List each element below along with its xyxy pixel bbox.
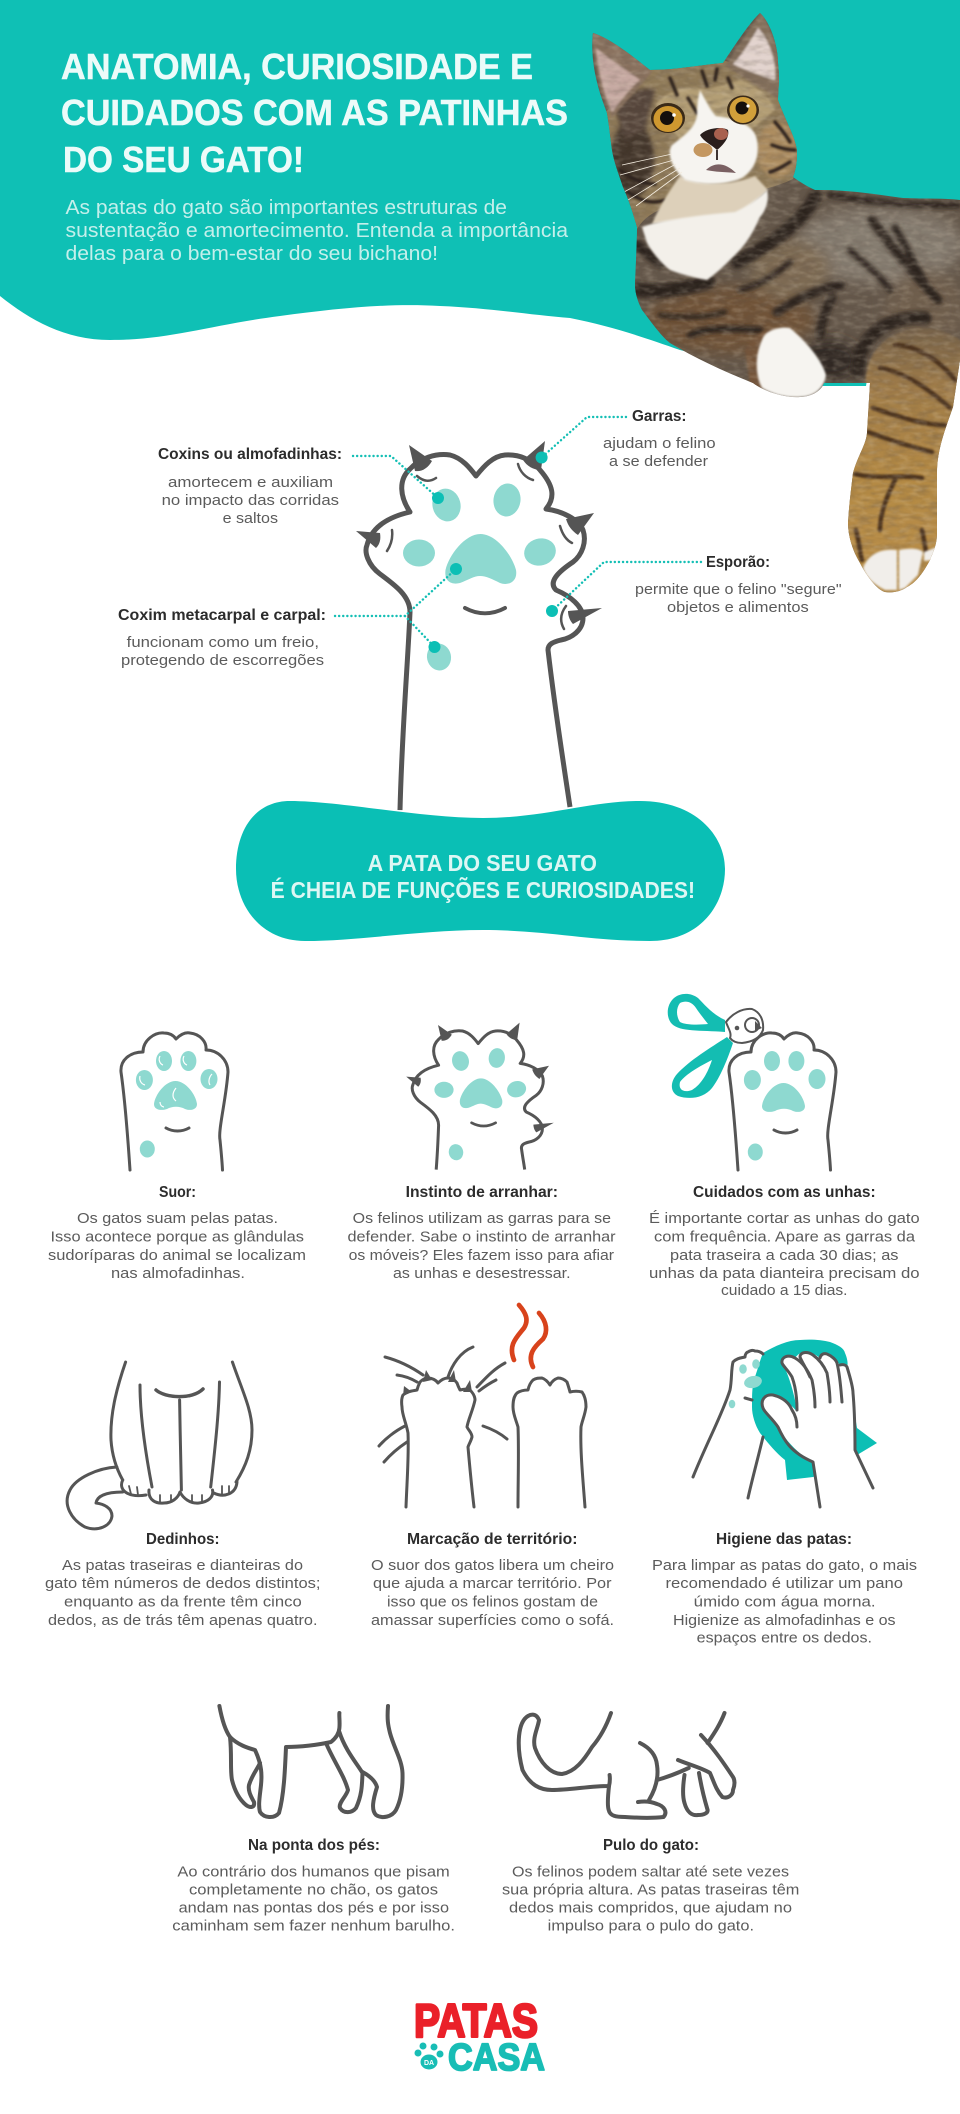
- logo paw icon: DA: [424, 2060, 434, 2067]
- label: garras: Garras:: [632, 408, 686, 425]
- icon: paw being clipped: [729, 1033, 836, 1170]
- cat cream neck: [652, 176, 768, 224]
- pulo text: sua própria altura. As patas traseiras têm: [502, 1882, 799, 1898]
- label: coxim metacarpal e carpal: Coxim metacarpal e carpal:: [118, 607, 326, 624]
- paw outline: [366, 455, 584, 810]
- claws: [356, 441, 602, 624]
- leader lines: [335, 417, 701, 647]
- label: coxins: no impacto das corridas: [162, 492, 339, 509]
- cuidados text: É importante cortar as unhas do gato: [649, 1210, 920, 1227]
- title: CUIDADOS COM AS PATINHAS: [61, 92, 568, 133]
- intro text: delas para o bem-estar do seu bichano!: [66, 243, 438, 265]
- icon: jumping cat: [519, 1713, 734, 1818]
- instinto text: as unhas e desestressar.: [393, 1265, 570, 1282]
- logo: patas da casa: [414, 1994, 545, 2079]
- cat head colouring: [605, 60, 799, 229]
- cat ears: [590, 10, 782, 118]
- marcação text: [371, 1531, 614, 1629]
- cuidados text: pata traseira a cada 30 dias; as: [670, 1247, 898, 1264]
- suor text: Os gatos suam pelas patas.: [77, 1210, 278, 1227]
- logo word patas: PATAS: [414, 1994, 538, 2047]
- cuidados text: com frequência. Apare as garras da: [654, 1229, 916, 1246]
- na ponta text: [172, 1837, 455, 1935]
- panel: marcação de território: [371, 1305, 614, 1629]
- panel: higiene das patas: [652, 1340, 917, 1647]
- marcação text: Marcação de território:: [407, 1531, 578, 1548]
- cat white front paw: [757, 328, 826, 397]
- mouth arc: [465, 608, 505, 613]
- teal banner blob: [236, 801, 725, 941]
- higiene text: recomendado é utilizar um pano: [666, 1575, 903, 1592]
- cat base coat: [585, 5, 960, 605]
- intro text: As patas do gato são importantes estruturas de: [66, 197, 507, 219]
- cat white muzzle: [670, 90, 758, 184]
- cat whiskers: [620, 154, 682, 206]
- intro text: sustentação e amortecimento. Entenda a importância: [66, 220, 569, 242]
- instinto text: defender. Sabe o instinto de arranhar: [348, 1229, 616, 1246]
- label: coxim metacarpal e carpal: [118, 607, 326, 669]
- label: esporão: [635, 554, 842, 616]
- panel: instinto de arranhar: [348, 1023, 616, 1282]
- dedinhos text: enquanto as da frente têm cinco: [64, 1594, 302, 1611]
- higiene text: espaços entre os dedos.: [697, 1630, 872, 1647]
- marcação text: O suor dos gatos libera um cheiro: [371, 1557, 614, 1574]
- label: esporão: permite que o felino "segure": [635, 581, 842, 598]
- pulo text: Os felinos podem saltar até sete vezes: [512, 1864, 789, 1881]
- dedinhos text: Dedinhos:: [146, 1531, 220, 1548]
- icon: paw with claws: [406, 1023, 554, 1170]
- icon: human hand: [762, 1352, 873, 1507]
- cat foreleg stripes: [855, 345, 955, 560]
- label: coxins: amortecem e auxiliam: [168, 474, 333, 491]
- header background wave: [0, 0, 960, 386]
- marcação text: amassar superfícies como o sofá.: [371, 1612, 614, 1629]
- cat fur texture: [585, 5, 960, 605]
- instinto text: [348, 1184, 616, 1282]
- label: coxim metacarpal e carpal: protegendo de escorregões: [121, 652, 324, 669]
- label: esporão: objetos e alimentos: [667, 599, 809, 616]
- cuidados text: Cuidados com as unhas:: [693, 1184, 876, 1201]
- suor text: nas almofadinhas.: [111, 1265, 245, 1282]
- icon: cleaning cloth: [752, 1340, 877, 1480]
- label: esporão: Esporão:: [706, 554, 770, 571]
- instinto text: Instinto de arranhar:: [406, 1184, 558, 1201]
- panel: dedinhos: [45, 1362, 320, 1629]
- higiene text: úmido com água morna.: [694, 1594, 876, 1611]
- suor text: Isso acontece porque as glândulas: [50, 1229, 304, 1246]
- na ponta text: andam nas pontas dos pés e por isso: [179, 1900, 449, 1917]
- na ponta text: caminham sem fazer nenhum barulho.: [172, 1918, 455, 1935]
- icon: nail clipper: [668, 994, 763, 1098]
- panel: pulo do gato: [502, 1713, 799, 1935]
- pulo text: Pulo do gato:: [603, 1837, 699, 1854]
- higiene text: [652, 1531, 917, 1647]
- title: ANATOMIA, CURIOSIDADE E: [61, 46, 533, 87]
- icon: sweating paw: [121, 1033, 228, 1170]
- panel: na ponta dos pés: [172, 1706, 455, 1935]
- icon: orange scent lines: [512, 1305, 546, 1367]
- cat illustration: [585, 5, 960, 605]
- leader dots: [428, 452, 558, 653]
- panel: cuidados com as unhas: [649, 994, 920, 1299]
- na ponta text: Na ponta dos pés:: [248, 1837, 380, 1854]
- higiene text: Higiene das patas:: [716, 1531, 852, 1548]
- title: [61, 46, 568, 180]
- icon: kneading paws: [379, 1347, 586, 1507]
- na ponta text: completamente no chão, os gatos: [189, 1882, 438, 1898]
- intro text: [66, 197, 569, 265]
- cat head stripes: [620, 69, 795, 202]
- anatomy diagram: labelled paw: [335, 417, 701, 810]
- cat hanging foreleg: [848, 330, 960, 592]
- panel: suor: [48, 1033, 306, 1282]
- na ponta text: Ao contrário dos humanos que pisam: [177, 1864, 450, 1881]
- pulo text: [502, 1837, 799, 1935]
- dedinhos text: gato têm números de dedos distintos;: [45, 1575, 320, 1592]
- claw sheath arcs: [387, 464, 572, 629]
- dedinhos text: [45, 1531, 320, 1629]
- pulo text: impulso para o pulo do gato.: [548, 1918, 754, 1935]
- suor text: sudoríparas do animal se localizam: [48, 1247, 306, 1264]
- cat nose and mouth: [694, 128, 736, 173]
- label: coxins: e saltos: [223, 510, 278, 527]
- label: garras: a se defender: [609, 453, 708, 470]
- suor text: Suor:: [159, 1184, 196, 1201]
- label: garras: [603, 408, 716, 470]
- cat eyes: [651, 96, 759, 133]
- icon: cat paw being cleaned: [693, 1350, 763, 1498]
- main pad: [445, 534, 516, 584]
- instinto text: Os felinos utilizam as garras para se: [353, 1210, 611, 1227]
- marcação text: que ajuda a marcar território. Por: [373, 1575, 612, 1592]
- higiene text: Para limpar as patas do gato, o mais: [652, 1557, 917, 1574]
- carpal pad: [424, 641, 454, 673]
- title: DO SEU GATO!: [63, 139, 304, 180]
- teal banner blob: É CHEIA DE FUNÇÕES E CURIOSIDADES!: [271, 876, 695, 903]
- cat white chest: [642, 190, 768, 280]
- logo word casa: CASA: [448, 2037, 545, 2079]
- cuidados text: unhas da pata dianteira precisam do: [649, 1265, 920, 1282]
- banner text: A PATA DO SEU GATO: [368, 850, 597, 876]
- icon: cat legs on tiptoe: [219, 1706, 403, 1817]
- label: coxins: [158, 446, 342, 527]
- cat coat colour patches: [645, 207, 960, 380]
- toe pads: [403, 482, 559, 569]
- instinto text: os móveis? Eles fazem isso para afiar: [349, 1247, 614, 1264]
- suor text: [48, 1184, 306, 1282]
- marcação text: isso que os felinos gostam de: [387, 1594, 598, 1611]
- cuidados text: [649, 1184, 920, 1299]
- cat brown front leg: [746, 330, 766, 390]
- cat dark fur bands: [637, 195, 958, 372]
- icon: sitting cat legs and tail: [67, 1362, 252, 1529]
- cuidados text: cuidado a 15 dias.: [721, 1282, 848, 1299]
- dedinhos text: dedos, as de trás têm apenas quatro.: [48, 1612, 318, 1629]
- label: coxim metacarpal e carpal: funcionam como um freio,: [127, 634, 319, 651]
- higiene text: Higienize as almofadinhas e os: [673, 1612, 896, 1629]
- pulo text: dedos mais compridos, que ajudam no: [509, 1900, 792, 1917]
- label: coxins: Coxins ou almofadinhas:: [158, 446, 342, 463]
- dedinhos text: As patas traseiras e dianteiras do: [62, 1557, 303, 1574]
- label: garras: ajudam o felino: [603, 435, 716, 452]
- cat white toes on hanging paw: [863, 547, 937, 590]
